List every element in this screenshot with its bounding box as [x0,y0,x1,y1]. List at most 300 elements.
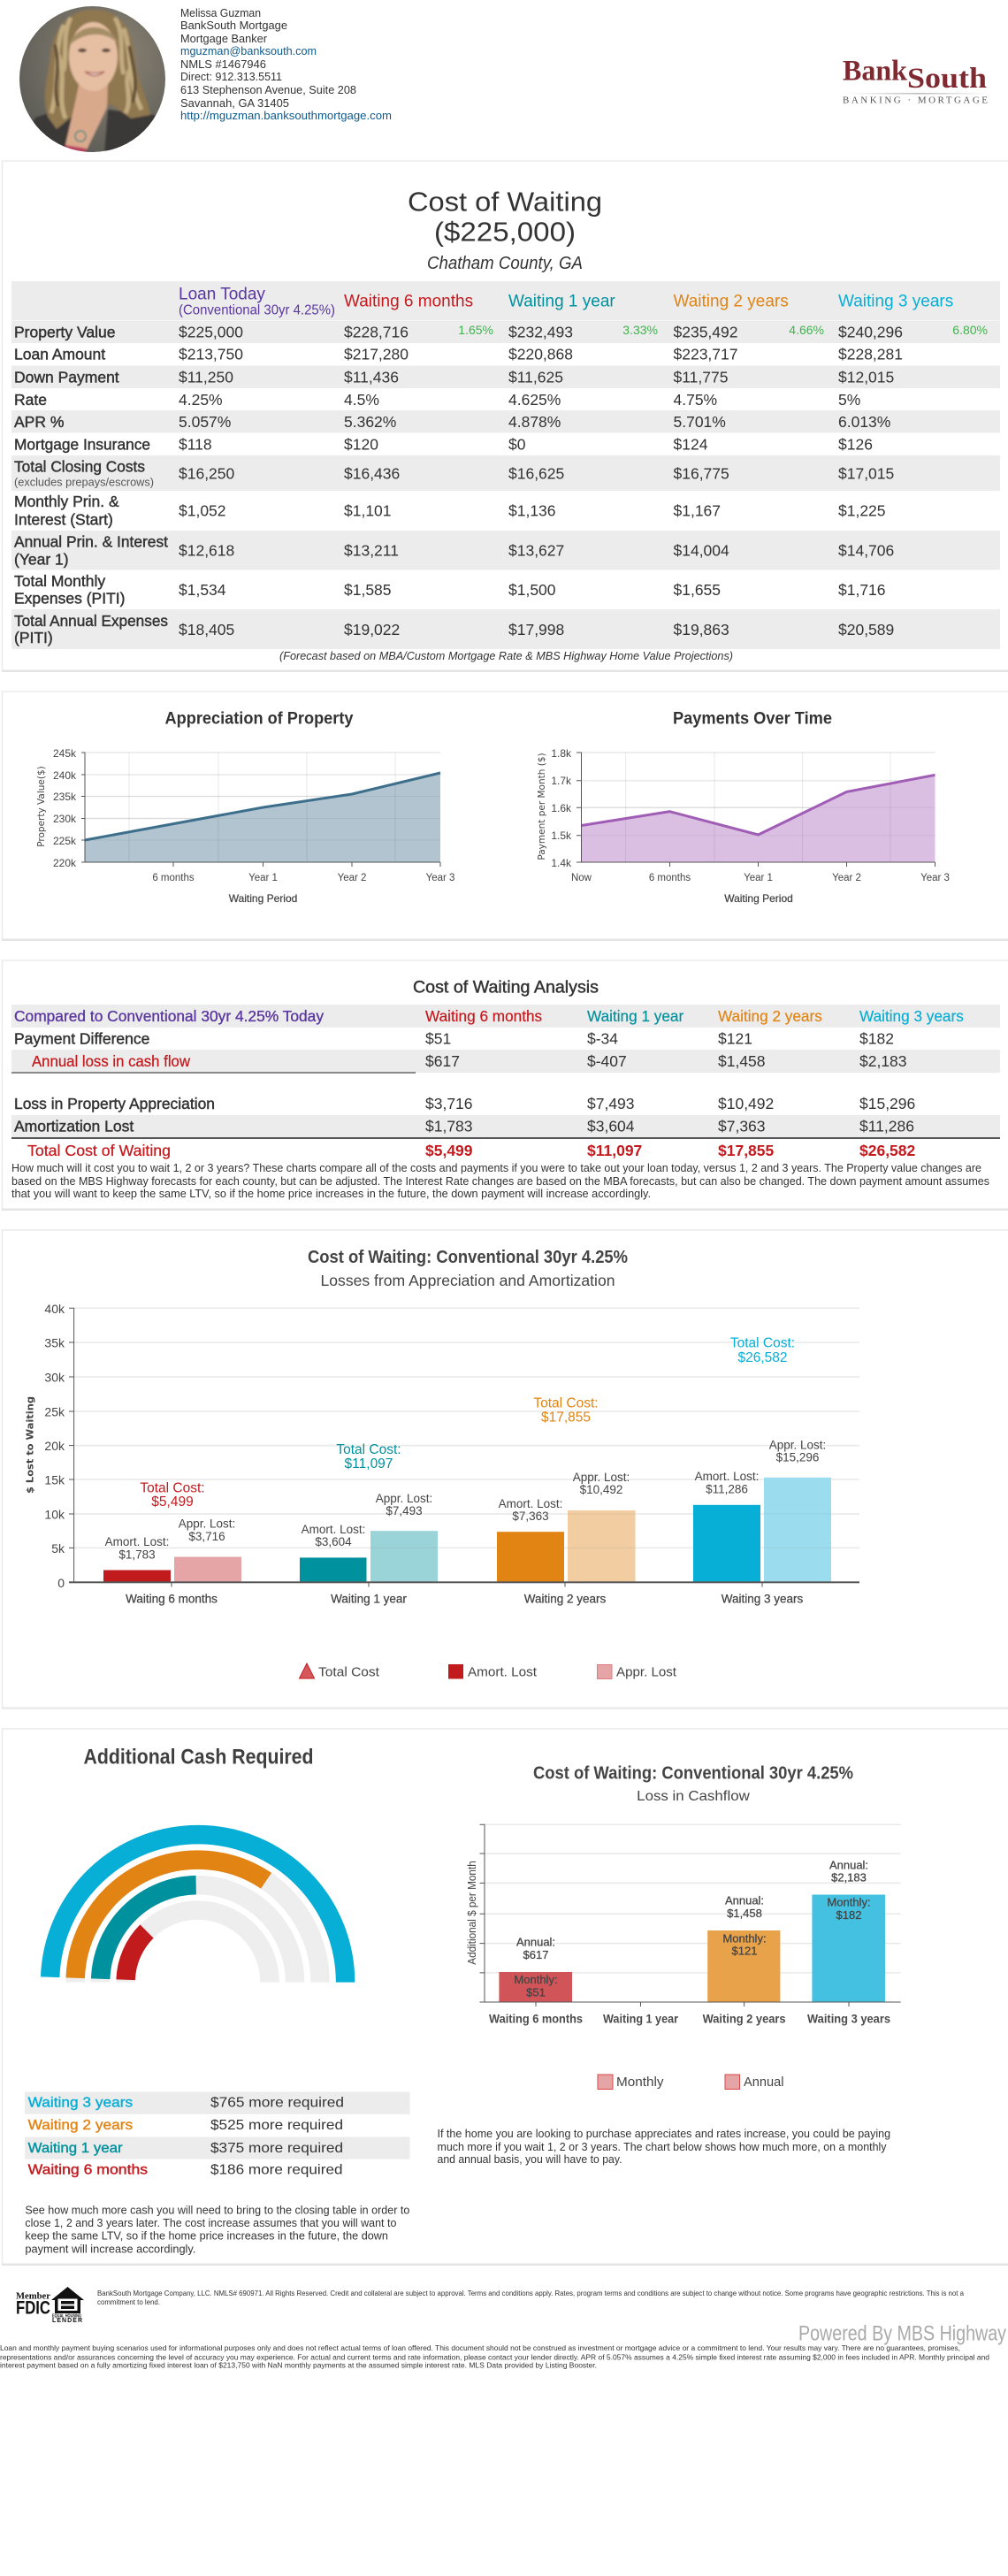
y axis labels: 1.5k [551,829,572,842]
row: down payment: $11,625 [508,368,563,386]
table: cash required: $525 more required [210,2118,343,2133]
x axis labels: Now [571,873,592,883]
row: amortization lost: $7,363 [718,1118,766,1135]
panel: cost of waiting analysis [2,960,1008,1211]
data labels: waiting 1 year: $3,604 [315,1535,352,1548]
row: down payment: $11,436 [344,368,399,386]
row: APR [11,410,1000,433]
data labels: waiting 1 year: $7,493 [386,1504,423,1517]
table header row: Waiting 2 years [674,292,789,311]
panel: cost of waiting table [2,161,1008,672]
row: total monthly expenses: $1,500 [508,581,556,599]
paragraph: closing table cash: keep the same LTV, so if the home price increases in the future, the down [25,2230,388,2243]
data labels: $121 [732,1944,757,1958]
title [408,186,602,248]
row: down payment: Down Payment [14,368,119,386]
row: annual loss in cash flow: $617 [425,1052,460,1070]
bars: waiting 1 year [300,1531,438,1582]
data labels: waiting 2 years [499,1395,630,1523]
row: total monthly expenses: $1,585 [344,581,392,599]
x axis title: Waiting Period [229,892,297,905]
legal text: disclaimer: Loan and monthly payment buying scenarios used for informational purposes only and does not reflect actual terms of loan offered. This document should not be construed as investment or mortgage advice or a commitment to lend. Your results may vary. There are no guarantees, promises, [0,2343,960,2352]
row: down payment: $12,015 [838,368,894,386]
row: property value: $235,492 [674,324,737,341]
data labels: waiting 1 year: Amort. Lost: [302,1523,365,1536]
x axis labels: 6 months [152,873,195,883]
data labels: $182 [836,1908,861,1922]
row: rate: 4.625% [508,391,561,409]
row: annual loss in cash flow: $2,183 [859,1052,907,1070]
data labels: $1,458 [727,1907,762,1920]
bar: waiting 2 years [707,1930,780,2002]
row: total annual expenses [11,609,1000,649]
row: APR: 6.013% [838,413,890,431]
category labels [489,2013,890,2025]
analysis header row: Waiting 3 years [859,1007,964,1025]
row: rate [14,391,860,409]
data labels: waiting 1 year: Appr. Lost: [376,1492,432,1505]
data labels: waiting 6 months: Amort. Lost: [105,1535,169,1548]
x axis labels [152,873,454,883]
table: cash required: Waiting 3 years [28,2096,133,2110]
legal text: disclaimer: representations and/or assurances concerning the level of accuracy you may experience. For actual and current terms and rate information, please contact your lender directly. APR of 5.057% assumes a 4.25% simple fixed interest rate assuming $2,000 in fees included in APR. Monthly principal and [0,2352,989,2361]
data labels: waiting 6 months [105,1480,235,1562]
row: total monthly expenses: Total Monthly [14,572,105,590]
contact text block: Mortgage Banker [180,33,267,45]
x axis title: Waiting Period [724,892,793,905]
paragraph: closing table cash: close 1, 2 and 3 years later. The cost increase assumes that you will want to [25,2217,396,2229]
panel: appreciation and payment charts [2,692,1008,941]
icon: member FDIC equal housing lender [16,2287,84,2324]
data labels: $617 [523,1948,548,1961]
row: total cost of waiting: $5,499 [425,1142,473,1159]
paragraph: cashflow explanation: If the home you are looking to purchase appreciates and rates increase, you could be paying [437,2128,890,2140]
row: payment difference: $51 [425,1029,451,1047]
title: Cost of Waiting [408,186,602,218]
contact text block: BankSouth Mortgage [180,19,287,32]
row: total cost of waiting: $26,582 [859,1142,916,1159]
data labels: Monthly: [514,1973,558,1986]
row: monthly principal and interest: $1,225 [838,502,886,520]
row: total cost of waiting: $17,855 [718,1142,775,1159]
row: payment difference: $-34 [587,1029,618,1047]
bar: waiting 3 years [812,1894,885,2002]
row: property value: 3.33% [622,323,658,337]
row: loan amount: $223,717 [674,345,737,363]
row: total cost of waiting: Total Cost of Waiting [27,1142,171,1159]
row: APR: 5.362% [344,413,396,431]
heading: additional cash required: Additional Cash Required [83,1746,313,1769]
table: cash required [25,2092,410,2177]
panel: losses from appreciation and amortization [2,1230,1008,1708]
contact text block [180,7,392,122]
data labels: Annual: [516,1935,555,1949]
y axis labels: 5k [51,1541,65,1556]
row: down payment [11,366,1000,388]
row: mortgage insurance: $120 [344,435,378,453]
chart: payments over time [537,709,950,905]
x axis labels: Year 1 [744,873,773,883]
x axis labels: Year 2 [338,873,366,883]
row: property value: 4.66% [789,323,824,337]
category labels: Waiting 6 months [126,1592,218,1606]
chart: appreciation of property [36,709,454,905]
row: payment difference [14,1029,894,1047]
analysis explanation paragraph [11,1162,989,1200]
y axis labels: 230k [53,813,77,825]
row: mortgage insurance [14,435,873,453]
row: property value: $225,000 [179,324,243,341]
analysis header row: Waiting 1 year [587,1007,683,1025]
data labels: waiting 6 months: $5,499 [151,1494,194,1510]
row: loan amount: Loan Amount [14,345,105,363]
icon: member FDIC equal housing lender: FDIC [16,2297,50,2319]
row: property value: 6.80% [952,323,988,337]
row: property value: 1.65% [458,323,493,337]
table: cash required: Waiting 1 year [28,2141,123,2156]
analysis header row [11,1005,1000,1028]
row: property value [11,321,1000,343]
row: loan amount: $228,281 [838,345,903,363]
table: cash required: $375 more required [210,2141,343,2156]
y axis labels: 1.8k [551,747,572,760]
legend: cashflow [598,2075,783,2090]
data labels: waiting 2 years: $17,855 [541,1410,591,1425]
contact text block: NMLS #1467946 [180,58,266,71]
y axis labels: 25k [44,1404,65,1418]
row: annual principal and interest: (Year 1) [14,550,69,568]
y axis labels: 15k [44,1473,65,1487]
y axis title: Additional $ per Month [465,1861,478,1965]
row: monthly principal and interest: $1,052 [179,502,226,520]
paragraph: closing table cash: payment will increase accordingly. [25,2243,195,2255]
chart title: Cost of Waiting: Conventional 30yr 4.25% [308,1248,628,1267]
row: APR: 4.878% [508,413,561,431]
category labels: Waiting 2 years [703,2013,786,2025]
row: total closing costs [11,455,1000,491]
table header row: Waiting 6 months [344,292,473,311]
row: annual loss in cash flow: $1,458 [718,1052,766,1070]
bars: waiting 3 years [693,1478,831,1582]
row: annual principal and interest: $14,706 [838,541,894,559]
data labels: waiting 2 years: $10,492 [580,1483,622,1496]
row: total monthly expenses: $1,655 [674,581,721,599]
row: total cost of waiting: $11,097 [587,1142,642,1159]
row: down payment: $11,250 [179,368,233,386]
area and line [577,753,935,867]
x axis labels [571,873,950,883]
y axis labels: 1.6k [551,802,572,814]
contact text block: Savannah, GA 31405 [180,97,289,110]
table header row: Waiting 1 year [508,292,615,311]
bars: waiting 6 months [103,1556,241,1582]
row: annual principal and interest: $14,004 [674,541,729,559]
legend: Amort. Lost [468,1664,538,1680]
row: APR: 5.057% [179,413,231,431]
row: annual principal and interest: $13,211 [344,541,399,559]
row: loss in property appreciation: $15,296 [859,1095,915,1112]
legal text: disclaimer [0,2343,989,2370]
row: annual principal and interest: $13,627 [508,541,564,559]
data labels: waiting 1 year: Total Cost: [336,1442,401,1457]
legend: cashflow: Annual [744,2075,783,2090]
analysis explanation paragraph: How much will it cost you to wait 1, 2 or 3 years? These charts compare all of the costs and payments if you were to take out your loan today, versus 1, 2 and 3 years. The Property value changes are [11,1162,981,1174]
logo: BankSouth [843,55,988,106]
data labels: waiting 3 years: Amort. Lost: [695,1470,759,1483]
row: property value: $232,493 [508,324,573,341]
paragraph: cashflow explanation: much more if you wait 1, 2 or 3 years. The chart below shows how much more, on a monthly [437,2141,887,2153]
row: property value: $240,296 [838,324,903,341]
row: loss in property appreciation: $3,716 [425,1095,473,1112]
bar: waiting 6 months [499,1972,572,2002]
table: cash required: Waiting 2 years [28,2118,133,2133]
category labels: Waiting 3 years [722,1592,804,1606]
data labels: waiting 3 years: Total Cost: [730,1335,795,1351]
row: amortization lost [11,1115,1000,1139]
row: total annual expenses: $19,863 [674,621,729,638]
icon: member FDIC equal housing lender: Member [16,2292,50,2301]
table: cash required: $186 more required [210,2163,343,2177]
y axis labels: 30k [44,1371,65,1385]
row: total annual expenses: Total Annual Expenses [14,612,168,630]
row: total monthly expenses [14,572,886,607]
row: total closing costs: $16,775 [674,465,729,483]
bar chart: losses [25,1302,859,1606]
data labels [514,1859,871,1999]
row: total annual expenses: (PITI) [14,629,53,646]
row: loss in property appreciation: Loss in Property Appreciation [14,1095,215,1112]
row: property value: Property Value [14,324,115,341]
legend: Total Cost [318,1664,380,1680]
paragraph: cashflow explanation: and annual basis, you will have to pay. [437,2153,622,2166]
subtitle: county: Chatham County, GA [427,254,583,273]
title: ($225,000) [434,216,576,248]
legend: cashflow: Monthly [616,2075,664,2090]
logo: BankSouth: South [907,63,987,95]
row: monthly principal and interest: Monthly Prin. & [14,493,119,510]
row: APR: APR % [14,413,64,431]
category labels [126,1592,804,1606]
row: annual principal and interest [11,531,1000,569]
logo: BankSouth: Bank [843,55,908,87]
contact text block: Direct: 912.313.5511 [180,71,282,83]
row: monthly principal and interest [14,493,886,529]
chart subtitle: Losses from Appreciation and Amortization [320,1272,615,1289]
y axis labels [551,747,572,869]
data labels: waiting 2 years: Appr. Lost: [573,1471,630,1484]
row: payment difference: $121 [718,1029,752,1047]
legal text: disclaimer: interest payment based on a fully amortizing fixed interest loan of $213,750 with NaN monthly payments at the assumed simple interest rate. MLS Data provided by Listing Booster. [0,2361,597,2370]
table: cash required: $765 more required [210,2096,344,2110]
category labels: Waiting 2 years [524,1592,607,1606]
row: monthly principal and interest: Interest (Start) [14,511,113,529]
x axis labels: Year 3 [426,873,454,883]
row: rate: 4.5% [344,391,379,409]
row: monthly principal and interest: $1,101 [344,502,392,520]
y axis labels: 40k [44,1302,65,1316]
y axis labels: 245k [53,747,77,760]
contact text block: 613 Stephenson Avenue, Suite 208 [180,84,356,96]
y axis labels: 225k [53,835,77,847]
row: total annual expenses: $20,589 [838,621,894,638]
data labels: waiting 6 months: $1,783 [118,1548,156,1562]
table header row: Waiting 3 years [838,292,953,311]
area and line [81,753,440,867]
row: rate: Rate [14,391,47,409]
row: total annual expenses: $17,998 [508,621,564,638]
paragraph: cashflow explanation [437,2128,890,2166]
data labels: waiting 1 year: $11,097 [345,1456,393,1471]
row: amortization lost: Amortization Lost [14,1118,134,1135]
y axis labels: 235k [53,791,77,803]
category labels: Waiting 1 year [331,1592,407,1606]
y axis labels: 1.4k [551,857,572,869]
y axis title: Payment per Month ($) [537,753,547,860]
y axis labels [53,747,77,869]
row: total closing costs: Total Closing Costs [14,458,145,476]
x axis labels: Year 2 [832,873,861,883]
row: annual loss in cash flow: $-407 [587,1052,627,1070]
legend: Appr. Lost [616,1664,677,1680]
data labels: waiting 6 months: $3,716 [188,1530,225,1543]
row: loan amount: $220,868 [508,345,573,363]
row: loan amount: $217,280 [344,345,409,363]
data labels: Annual: [725,1894,764,1907]
analysis explanation paragraph: that you will want to keep the same LTV, so if the home price increases in the future, the down payment will increase accordingly. [11,1188,651,1200]
row: loan amount [14,345,903,363]
row: rate: 4.25% [179,391,223,409]
table header row [11,281,1000,320]
legal text: company: commitment to lend. [97,2297,160,2306]
row: amortization lost: $1,783 [425,1118,473,1135]
row: total closing costs: $17,015 [838,465,894,483]
data labels: $51 [526,1986,546,1999]
icon: member FDIC equal housing lender: EQUAL HOUSING [52,2313,81,2319]
row: total monthly expenses: $1,534 [179,581,226,599]
row: mortgage insurance: $118 [179,435,212,453]
y axis labels: 20k [44,1439,65,1453]
row: mortgage insurance: $126 [838,435,873,453]
row: rate: 4.75% [674,391,717,409]
row: amortization lost: $3,604 [587,1118,635,1135]
row: property value: $228,716 [344,324,409,341]
legend [299,1663,677,1680]
row: total monthly expenses: $1,716 [838,581,886,599]
footnote: forecast source: (Forecast based on MBA/Custom Mortgage Rate & MBS Highway Home Value Projections) [279,650,733,662]
table: cash required: Waiting 6 months [28,2163,148,2177]
row: total annual expenses: $19,022 [344,621,400,638]
row: loss in property appreciation: $10,492 [718,1095,774,1112]
row: monthly principal and interest: $1,136 [508,502,556,520]
data labels: waiting 2 years: Total Cost: [533,1395,599,1411]
y axis title: $ Lost to Waiting [25,1396,35,1494]
icon: portrait photo [19,6,165,152]
analysis header row: Compared to Conventional 30yr 4.25% Today [14,1007,324,1025]
row: APR: 5.701% [674,413,726,431]
chart title: Appreciation of Property [164,709,354,729]
row: payment difference: $182 [859,1029,894,1047]
data labels: waiting 3 years: $26,582 [737,1350,788,1365]
data labels: waiting 2 years: Amort. Lost: [499,1497,562,1510]
data labels: waiting 1 year [302,1442,432,1548]
row: monthly principal and interest: $1,167 [674,502,721,520]
table header row: (Conventional 30yr 4.25%) [179,302,335,318]
data labels: waiting 3 years: $15,296 [776,1450,819,1464]
category labels: Waiting 1 year [603,2013,679,2025]
paragraph: closing table cash [25,2204,409,2255]
row: total monthly expenses: Expenses (PITI) [14,589,125,607]
row: down payment: $11,775 [674,368,728,386]
data labels: waiting 3 years: $11,286 [706,1482,748,1495]
data labels: $2,183 [831,1871,867,1884]
analysis title: Cost of Waiting Analysis [413,978,599,998]
row: mortgage insurance: $124 [674,435,708,453]
row: loss in property appreciation [14,1095,915,1112]
row: loss in property appreciation: $7,493 [587,1095,635,1112]
row: rate: 5% [838,391,860,409]
row: annual loss in cash flow: Annual loss in cash flow [32,1052,190,1070]
data labels: waiting 2 years: $7,363 [512,1510,549,1523]
y axis labels: 10k [44,1507,65,1521]
row: total closing costs: (excludes prepays/escrows) [14,476,154,488]
x axis labels: Year 1 [248,873,278,883]
data labels: waiting 6 months: Total Cost: [140,1480,205,1496]
chart subtitle: cashflow: Loss in Cashflow [637,1789,750,1804]
row: total closing costs: $16,625 [508,465,564,483]
contact text block: mguzman@banksouth.com [180,45,317,57]
row: total closing costs: $16,436 [344,465,400,483]
data labels: waiting 6 months: Appr. Lost: [179,1517,235,1531]
category labels: Waiting 6 months [489,2013,583,2025]
y axis labels: 240k [53,769,77,782]
row: total closing costs: $16,250 [179,465,235,483]
row: amortization lost: $11,286 [859,1118,914,1135]
table header row: Loan Today [179,285,265,304]
row: annual principal and interest: Annual Prin. & Interest [14,532,168,550]
contact text block: http://mguzman.banksouthmortgage.com [180,110,392,122]
y axis labels: 0 [57,1576,65,1590]
chart title: cashflow: Cost of Waiting: Conventional 30yr 4.25% [533,1763,853,1783]
category labels: Waiting 3 years [807,2013,890,2025]
gauge: semicircular cash required [50,1835,346,1983]
analysis header row: Waiting 6 months [425,1007,542,1025]
row: payment difference: Payment Difference [14,1029,149,1047]
legal text: company [97,2289,964,2306]
analysis header row: Waiting 2 years [718,1007,822,1025]
data labels: waiting 3 years: Appr. Lost: [769,1438,826,1451]
row: mortgage insurance: Mortgage Insurance [14,435,150,453]
analysis explanation paragraph: based on the MBS Highway forecasts for each county, but can be adjusted. The Interest Rate changes are based on the MBA forecasts, but can also be changed. The down payment amount assumes [11,1175,989,1188]
data labels: Monthly: [827,1896,871,1908]
y axis title: Property Value($) [36,766,47,847]
data labels: Annual: [829,1859,868,1871]
row: loan amount: $213,750 [179,345,243,363]
icon: member FDIC equal housing lender: LENDER [52,2318,82,2324]
row: total cost of waiting [27,1142,916,1159]
logo: BankSouth: BANKING · MORTGAGE [843,96,988,106]
x axis labels: 6 months [649,873,691,883]
chart title: Payments Over Time [673,709,832,729]
footer [0,2287,1006,2370]
bars: waiting 2 years [497,1510,635,1582]
data labels: waiting 3 years [695,1335,826,1495]
header: loan officer contact [12,4,988,159]
paragraph: closing table cash: See how much more cash you will need to bring to the closing table in order to [25,2204,409,2216]
contact text block: Melissa Guzman [180,7,261,19]
x axis labels: Year 3 [920,873,950,883]
row: mortgage insurance: $0 [508,435,526,453]
y axis labels: 35k [44,1335,65,1349]
